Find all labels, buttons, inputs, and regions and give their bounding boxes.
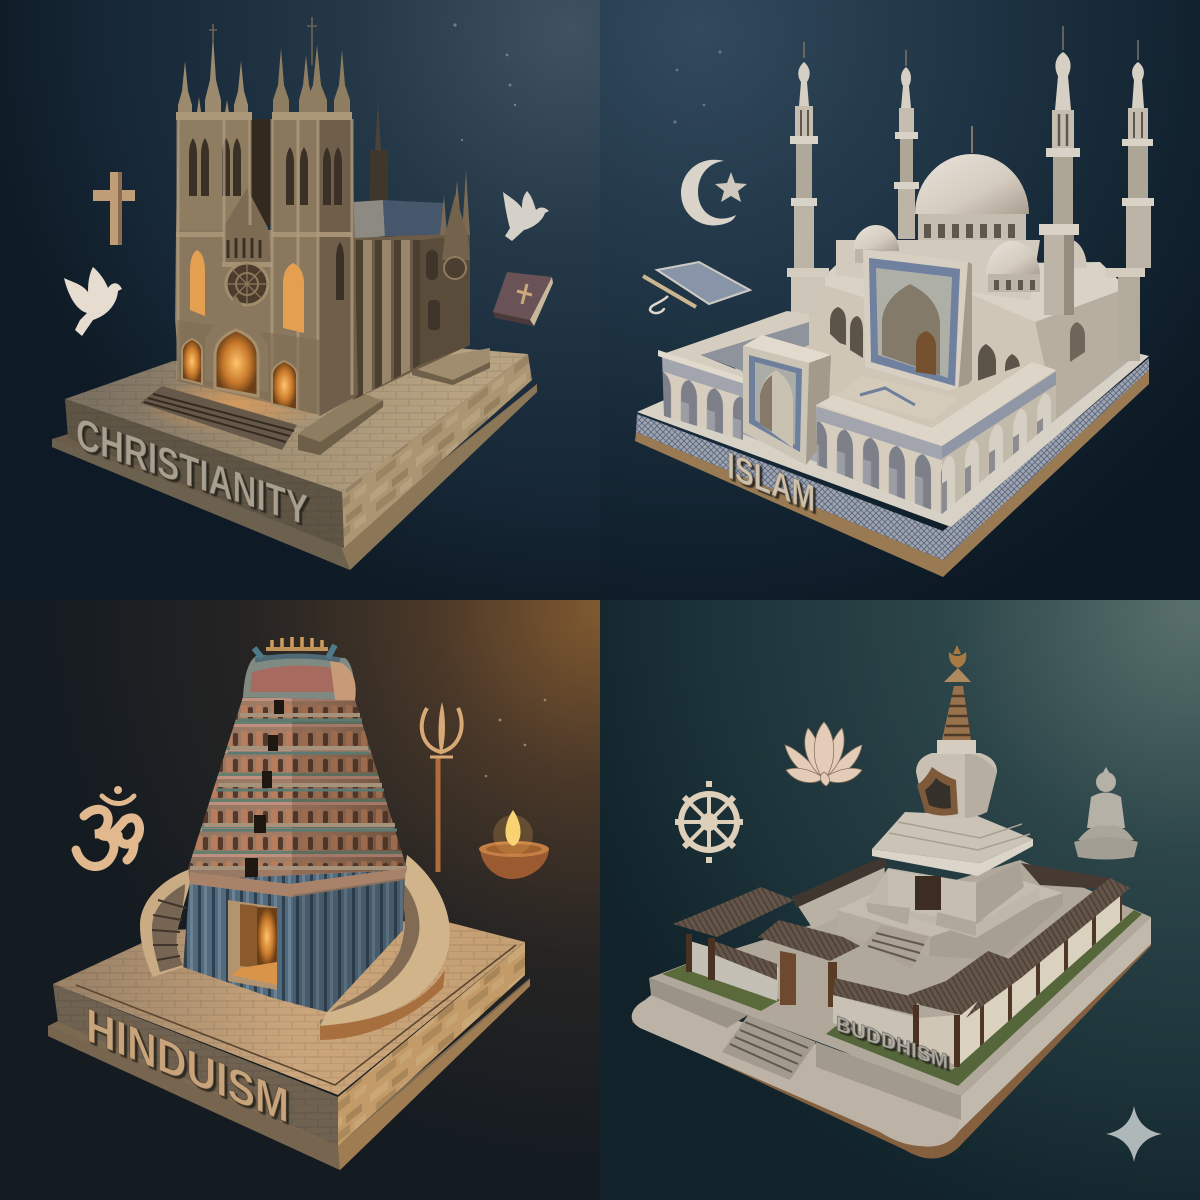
platform: sandstone base (48, 920, 530, 1170)
icon: crescent and star (681, 160, 747, 225)
platform label: CHRISTIANITY (76, 407, 308, 536)
platform: tiled base (635, 320, 1149, 577)
mosque main building (817, 126, 1137, 419)
icon: dharma wheel (675, 781, 743, 863)
lower stairs (722, 1015, 816, 1080)
curved stairs (140, 855, 450, 1040)
icon: bible (493, 272, 553, 326)
platform label: ISLAM (727, 444, 815, 521)
cathedral (175, 17, 470, 417)
pavement (761, 978, 833, 1035)
platform: rounded base (632, 860, 1151, 1159)
icon: om symbol (76, 788, 140, 866)
icon: dove left (64, 267, 122, 336)
panel: Christianity (0, 0, 600, 600)
terrace steps (298, 348, 490, 455)
courtyard (658, 311, 1056, 514)
panel: Hinduism (0, 600, 600, 1200)
stairs (140, 386, 297, 450)
icon: Buddha statue (1074, 767, 1138, 860)
icon: lotus (785, 722, 862, 786)
panel: Buddhism (600, 600, 1200, 1200)
icon: dove right (503, 191, 549, 241)
icon: diya lamp (479, 810, 549, 879)
icon: pen (643, 276, 696, 313)
stupa (837, 645, 1063, 969)
icon: trident (422, 702, 462, 872)
icon: sparkle watermark (1106, 1106, 1162, 1162)
back courtyard walls (792, 856, 1122, 929)
panel: Islam (600, 0, 1200, 600)
platform label: BUDDHISM (836, 1011, 948, 1074)
minarets (787, 26, 1154, 361)
gopuram temple (183, 637, 407, 1012)
icon: prayer mat (657, 262, 750, 304)
platform: stone base (52, 345, 537, 570)
platform label: HINDUISM (86, 999, 289, 1134)
icon: cross (93, 172, 135, 245)
courtyard walls and roofs (673, 878, 1130, 1067)
